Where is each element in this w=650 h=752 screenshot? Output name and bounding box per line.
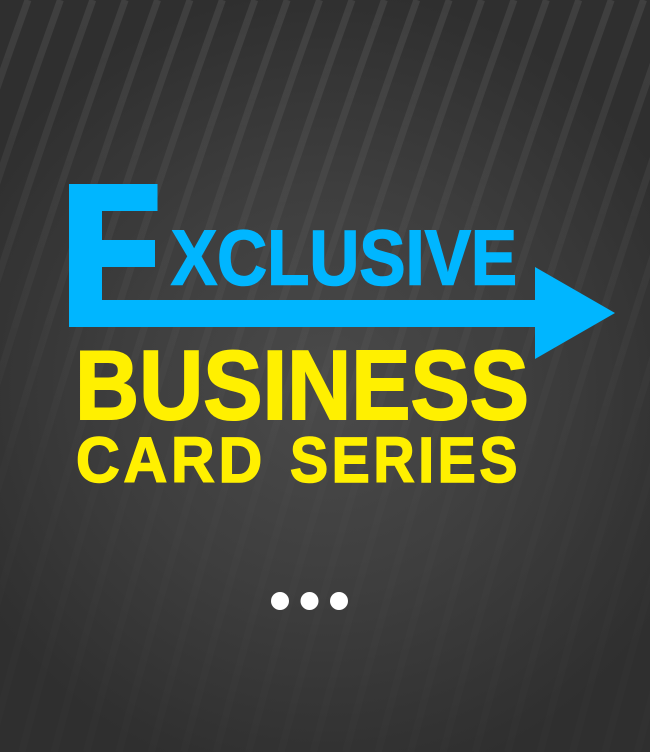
heading: CARD SERIES: CARD	[76, 424, 266, 496]
pagination dots	[271, 592, 348, 610]
heading: CARD SERIES	[76, 424, 521, 496]
heading: XCLUSIVE: XCLUSIVE	[171, 214, 517, 302]
heading: BUSINESS: BUSINESS	[75, 330, 529, 440]
logo: arrow with large E	[69, 184, 615, 359]
heading: CARD SERIES: SERIES	[290, 424, 521, 496]
